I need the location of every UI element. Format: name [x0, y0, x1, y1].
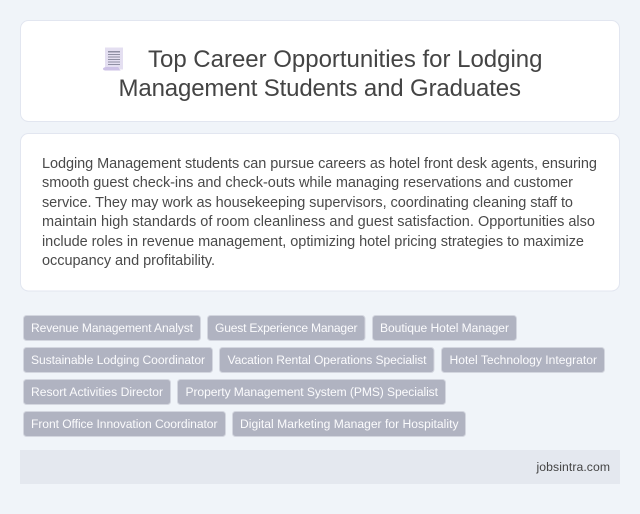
- title: Top Career Opportunities for Lodging: [148, 46, 542, 73]
- tag: Vacation Rental Operations Specialist: [220, 348, 434, 372]
- title: [118, 46, 542, 102]
- tag: Sustainable Lodging Coordinator: Sustainable Lodging Coordinator: [31, 353, 205, 367]
- tag: Property Management System (PMS) Specialist: Property Management System (PMS) Specialist: [186, 385, 439, 399]
- text block: description: include roles in revenue management, optimizing hotel pricing strategies to maximize: [42, 234, 584, 250]
- tag: Hotel Technology Integrator: Hotel Technology Integrator: [450, 353, 597, 367]
- tag: Guest Experience Manager: Guest Experience Manager: [215, 321, 358, 335]
- tag: Boutique Hotel Manager: [372, 316, 516, 340]
- footer: [20, 450, 620, 484]
- tag: Front Office Innovation Coordinator: Front Office Innovation Coordinator: [31, 417, 218, 431]
- tag: Boutique Hotel Manager: Boutique Hotel Manager: [380, 321, 509, 335]
- tag: Digital Marketing Manager for Hospitality: [232, 412, 466, 436]
- tag: Revenue Management Analyst: [24, 316, 200, 340]
- tag: Resort Activities Director: Resort Activities Director: [31, 385, 163, 399]
- text block: description: [42, 156, 597, 269]
- title: Management Students and Graduates: [118, 75, 521, 102]
- footer text: jobsintra.com: [536, 460, 610, 474]
- text block: description: occupancy and profitability.: [42, 253, 215, 269]
- text block: description: service. They may work as housekeeping supervisors, coordinating cleaning staff to: [42, 195, 573, 211]
- tag: Revenue Management Analyst: Revenue Management Analyst: [31, 321, 194, 335]
- tag: Digital Marketing Manager for Hospitality: Digital Marketing Manager for Hospitality: [240, 417, 459, 431]
- tag: Property Management System (PMS) Specialist: [178, 380, 446, 404]
- panel: description: [20, 134, 620, 291]
- text block: description: Lodging Management students can pursue careers as hotel front desk agents, ensuring: [42, 156, 597, 172]
- text block: description: maintain high standards of room cleanliness and guest satisfaction. Opportunities also: [42, 214, 595, 230]
- panel: title card: [20, 20, 620, 122]
- tag: Hotel Technology Integrator: [442, 348, 604, 372]
- text block: description: smooth guest check-ins and check-outs while managing reservations and customer: [42, 175, 573, 191]
- tag: Front Office Innovation Coordinator: [24, 412, 226, 436]
- icon: scroll document: [103, 48, 123, 70]
- tag: Resort Activities Director: [24, 380, 170, 404]
- tag: Vacation Rental Operations Specialist: Vacation Rental Operations Specialist: [228, 353, 427, 367]
- tag: Sustainable Lodging Coordinator: [24, 348, 212, 372]
- tag: Guest Experience Manager: [208, 316, 365, 340]
